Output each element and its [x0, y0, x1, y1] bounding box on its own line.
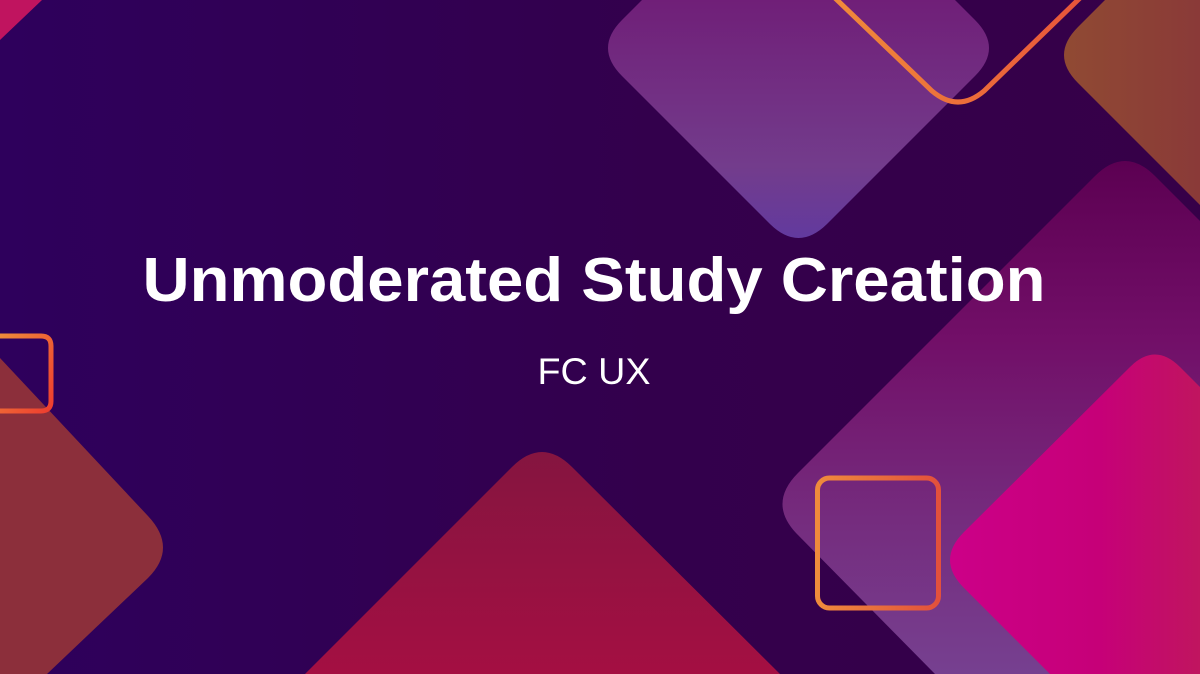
outline: left rounded square [0, 336, 51, 411]
shape: right pink diamond [950, 354, 1200, 674]
subtitle: FC UX [538, 351, 650, 392]
shape: large right purple diamond [782, 161, 1200, 674]
shape: top left pink corner [0, 0, 42, 40]
outline: top orange chevron [835, 0, 1080, 102]
title: Unmoderated Study Creation [142, 246, 1046, 315]
shape: top right brown diamond [1064, 0, 1200, 205]
shape: left red-brown diamond [0, 358, 163, 674]
shape: top centre purple diamond [608, 0, 989, 238]
shape: bottom centre red diamond [305, 452, 780, 674]
outline: orange rounded square [818, 478, 938, 608]
